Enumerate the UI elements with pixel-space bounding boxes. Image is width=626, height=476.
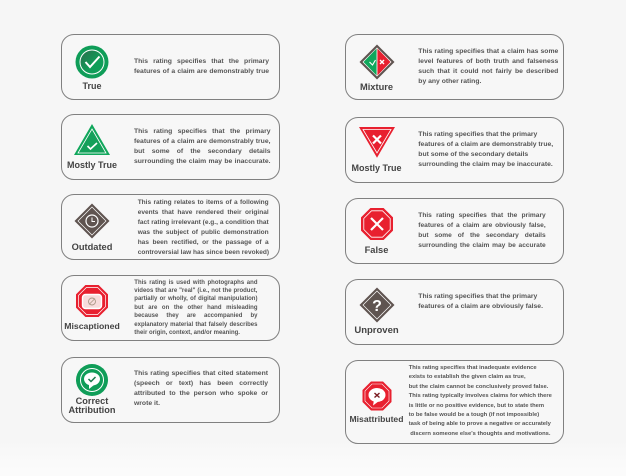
label: Mixture: Mixture [360, 82, 393, 92]
description: This rating typically involves claims for which there [409, 393, 552, 399]
description: videos that are "real" (i.e., not the product, [134, 288, 257, 294]
description: This rating specifies that the primary [418, 293, 537, 300]
description: attributed to the person who spoke or [134, 390, 268, 397]
description: but some of the secondary details [134, 148, 270, 155]
description [418, 131, 553, 168]
description: This rating is used with photographs and [134, 280, 257, 286]
description: task of being able to prove a negative or accurately [409, 421, 551, 427]
description: but the claim cannot be conclusively proved false. [409, 384, 548, 390]
description: This rating specifies that the primary [418, 212, 546, 219]
description: their origin, context, and/or meaning. [134, 330, 240, 336]
description: features of a claim are demonstrably true, [418, 141, 553, 148]
label: Correct Attribution: Attribution [69, 405, 115, 415]
description: has been rectified, or the passage of a [138, 239, 269, 246]
icon: red inverted triangle [359, 127, 395, 158]
description: discern someone else's thoughts and motivations. [410, 431, 551, 437]
panel: Miscaptioned [61, 275, 280, 341]
label: Unproven: Unproven [354, 325, 399, 336]
description: (speech or text) has been correctly [134, 380, 268, 387]
label: Mostly True: Mostly True [67, 160, 117, 170]
description [134, 58, 269, 75]
label: Outdated: Outdated [72, 242, 112, 252]
description: controversial law has since been revoked) [138, 249, 269, 256]
description [138, 199, 269, 256]
description: This rating specifies that the primary [134, 128, 270, 135]
description [134, 128, 270, 165]
description [418, 212, 546, 249]
description [418, 48, 558, 85]
description: fact rating irrelevant (e.g., a condition that [138, 219, 269, 226]
panel: Unproven [345, 279, 564, 345]
panel: Mixture [345, 34, 564, 100]
description [134, 280, 258, 336]
description: because they are accompanied by [134, 313, 257, 319]
description [134, 370, 268, 407]
description: This rating specifies that the primary [418, 131, 537, 138]
label: Misattributed: Misattributed [350, 414, 403, 424]
description: features of a claim are obviously false, [418, 222, 546, 229]
icon: grey diamond clock [74, 204, 110, 238]
description: This rating specifies that cited statement [134, 370, 268, 377]
description: but are on the other hand misleading [134, 305, 257, 311]
label: Correct Attribution [68, 396, 115, 415]
description: but some of the secondary details [418, 151, 528, 158]
label: Mostly True: Mostly True [351, 163, 402, 173]
panel: False [345, 198, 564, 264]
description: This rating relates to items of a following [138, 199, 269, 206]
description: This rating specifies that the primary [134, 58, 269, 65]
description: exists to establish the given claim as true, [409, 374, 526, 380]
panel: Mostly True [61, 114, 280, 180]
description: features of a claim are demonstrably true [134, 68, 269, 75]
icon: red octagon cross [361, 208, 393, 240]
description [418, 293, 543, 310]
label: Correct Attribution: Correct [76, 396, 108, 406]
description: surrounding the claim may be inaccurate. [134, 158, 270, 165]
panel: Outdated [61, 194, 280, 260]
description: features of a claim are demonstrably true, [134, 138, 270, 145]
panel: True [61, 34, 280, 100]
icon: grey diamond question mark [360, 288, 394, 322]
description: This rating specifies that inadequate evidence [409, 365, 537, 371]
description: partially or wholly, of digital manipulation) [134, 296, 257, 302]
description: surrounding the claim may be accurate [418, 242, 546, 249]
label: Miscaptioned: Miscaptioned [64, 321, 120, 331]
description: is little or no positive evidence, but to state them [409, 402, 544, 408]
icon: green circle speech bubble [76, 364, 108, 396]
icon: red octagon speech bubble [362, 382, 392, 410]
description: level features of both truth and falseness [418, 58, 558, 65]
icon: green triangle check [74, 124, 110, 155]
description [408, 365, 552, 437]
label: False: False [365, 245, 388, 255]
description: This rating specifies that a claim has some [418, 48, 558, 55]
icon: red octagon camera [76, 285, 108, 317]
description: features of a claim are obviously false. [418, 303, 543, 310]
icon: green circle check [76, 46, 108, 78]
icon: grey diamond question mark: ? [372, 298, 382, 315]
description: but some of the secondary details [418, 232, 546, 239]
description: was the subject of public demonstration [138, 229, 269, 236]
description: events that have rendered their original [138, 209, 269, 216]
description: by any other rating. [418, 78, 481, 85]
description: to be false would be a tough (if not impossible) [409, 412, 539, 418]
panel: Mostly False [345, 117, 564, 183]
panel: Misattributed [345, 360, 564, 444]
icon: half green half red diamond [360, 44, 394, 80]
description: surrounding the claim may be inaccurate. [418, 161, 553, 168]
label: True: True [82, 81, 102, 91]
description: such that it could not fairly be described [418, 68, 558, 75]
panel: Correct Attribution [61, 357, 280, 423]
description: explanatory material that falsely describes [134, 322, 257, 328]
description: wrote it. [134, 400, 160, 407]
